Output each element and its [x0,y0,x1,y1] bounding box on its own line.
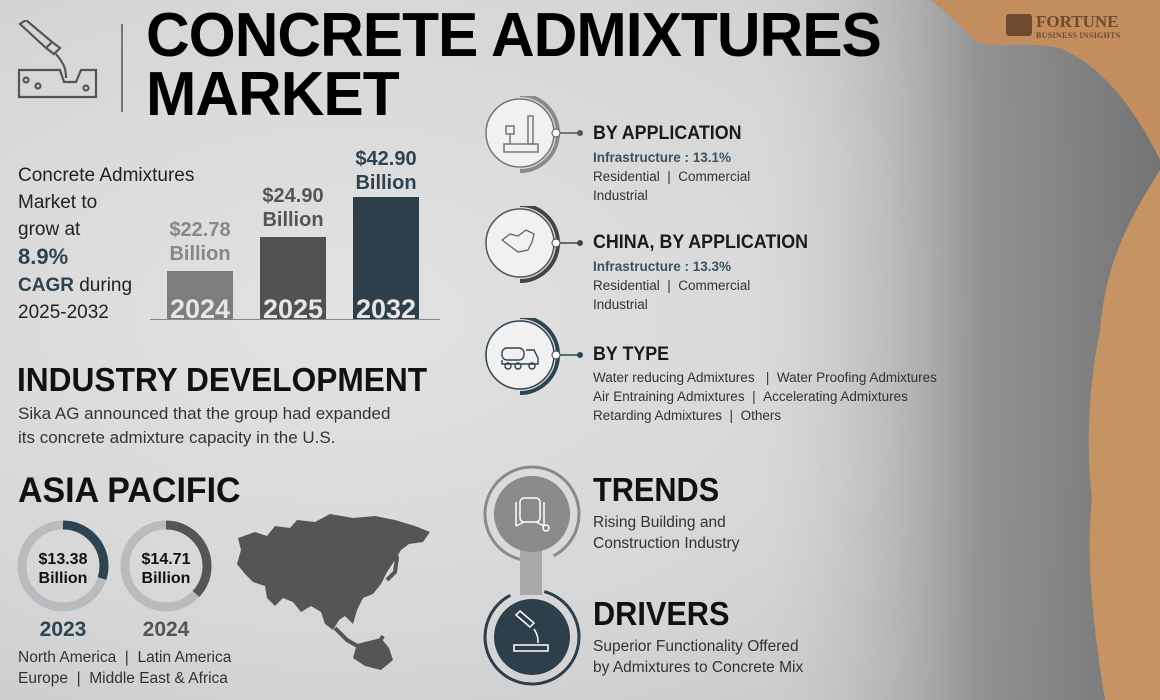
text: industry development: Sika AG announced that the group had expanded [18,404,390,423]
bar chart: Billion [262,209,324,231]
heading: china: CHINA, BY APPLICATION [593,232,808,253]
text: other regions [18,649,232,687]
panel: china by application [485,206,808,312]
donut charts: $13.38 [39,551,88,568]
text: CAGR statement: 2025-2032 [18,302,109,323]
logo: Fortune Business Insights [1006,12,1120,40]
text: application segments [593,150,750,203]
text: CAGR statement [18,165,194,323]
logo: Fortune Business Insights: FORTUNE [1036,12,1119,31]
bar chart: 2024 [170,294,230,324]
connector between trends and drivers [520,545,542,595]
bar 2024 [167,271,233,320]
bar chart: Billion [169,243,231,265]
donut charts: Billion [142,570,190,587]
text: china segments [593,259,750,312]
heading: industry development: INDUSTRY DEVELOPMENT [17,361,427,398]
text: china segments: Residential | Commercial [593,278,750,293]
text: trends: Construction Industry [593,535,739,552]
icon: drivers pour [484,590,580,686]
panel: by application [485,96,750,203]
donut charts: 2024 [143,618,190,641]
text: other regions: North America | Latin America [18,649,231,666]
donut charts [18,520,212,641]
logo: Fortune Business Insights: BUSINESS INSIGHTS [1036,31,1120,40]
text: drivers: Superior Functionality Offered [593,638,799,655]
text: type segments: Retarding Admixtures | Others [593,408,781,423]
text: type segments [593,370,937,423]
bar chart: $24.90 [262,185,324,207]
divider [121,24,123,112]
text: CAGR statement: Market to [18,192,97,213]
heading: asia pacific: ASIA PACIFIC [18,471,241,510]
bar 2032 [353,197,419,320]
text: application segments: Industrial [593,188,648,203]
bar chart: $22.78 [169,219,231,241]
icon: construction [485,96,583,173]
donut charts: Billion [39,570,87,587]
map: asia pacific [237,514,430,670]
bar chart [150,148,440,324]
text: trends: Rising Building and [593,514,726,531]
text: application segments: Residential | Commercial [593,169,750,184]
text: CAGR statement: grow at [18,219,80,240]
text: type segments: Air Entraining Admixtures | Accelerating Admixtures [593,389,908,404]
text: CAGR statement: Concrete Admixtures [18,165,194,186]
donut charts: $14.71 [142,551,191,568]
bar chart: 2025 [263,294,323,324]
text: type segments: Water reducing Admixtures | Water Proofing Admixtures [593,370,937,385]
bar chart: Billion [355,172,417,194]
icon: pouring concrete [18,20,98,98]
bar 2025 [260,237,326,320]
text: industry development [18,404,390,447]
text: CAGR statement: CAGR during [18,275,132,296]
text: drivers [593,638,803,676]
text: drivers: by Admixtures to Concrete Mix [593,659,803,676]
icon: trends mixer [484,466,580,561]
bar chart: $42.90 [355,148,417,170]
title: MARKET [146,60,399,129]
donut charts: 2023 [40,618,86,641]
panel: by type [485,318,937,423]
text: CAGR statement: 8.9% [18,244,68,269]
text: other regions: Europe | Middle East & Africa [18,670,228,687]
text: application segments: Infrastructure : 13.1% [593,150,731,165]
text: china segments: Infrastructure : 13.3% [593,259,731,274]
icon: mixer truck [485,318,583,395]
text: trends [593,514,740,552]
heading: trends: TRENDS [593,471,719,508]
text: china segments: Industrial [593,297,648,312]
heading: by application: BY APPLICATION [593,123,742,144]
bar chart: 2032 [356,294,416,324]
text: industry development: its concrete admixture capacity in the U.S. [18,428,335,447]
heading: drivers: DRIVERS [593,595,729,632]
heading: by type: BY TYPE [593,344,669,365]
title: CONCRETE ADMIXTURES [146,1,881,70]
title [146,1,881,129]
icon: china map [485,206,583,283]
